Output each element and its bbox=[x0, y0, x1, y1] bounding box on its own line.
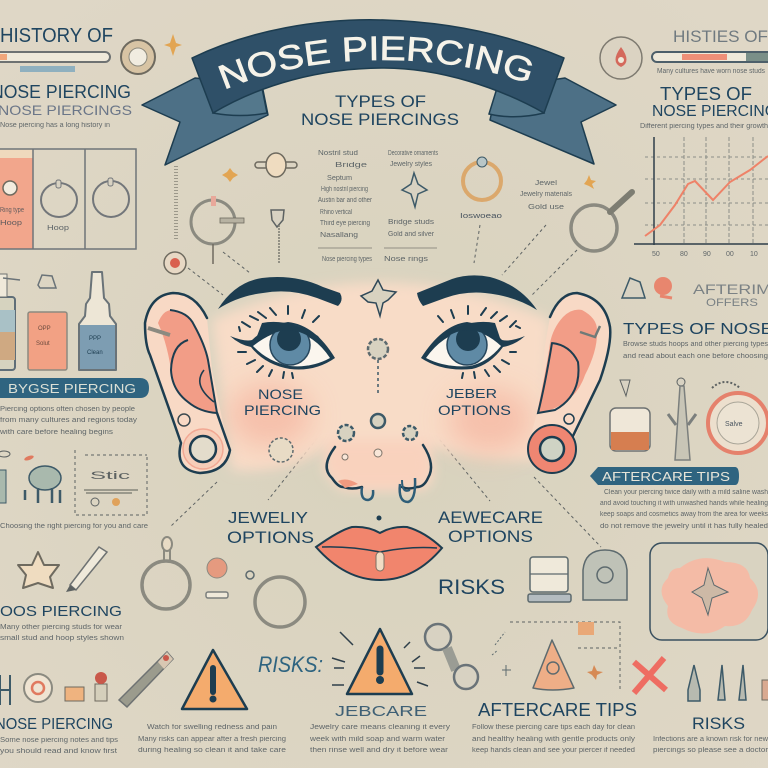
timeline bar bbox=[0, 52, 110, 72]
panel: three ring cards: Hoop bbox=[0, 220, 22, 227]
top-right block: Different piercing types and their growth bbox=[640, 123, 768, 130]
heading: nose piercing lower: you should read and know first bbox=[0, 748, 117, 755]
label: jewelry options: JEWELIY bbox=[228, 510, 308, 527]
heading: risks lower: Infections are a known risk for new bbox=[653, 736, 768, 743]
icons and label: aftercare offers: AFTERIM bbox=[693, 281, 768, 297]
heading: jebcare: Jewelry care means cleaning it every bbox=[310, 724, 451, 731]
right eyebrow bbox=[417, 275, 537, 310]
subtitle: types of nose piercings bbox=[301, 92, 459, 129]
heading: risks lower: RISKS bbox=[692, 714, 745, 733]
text block: aftercare tips bbox=[600, 489, 768, 530]
jewelry: magnifier ring bbox=[571, 192, 632, 251]
text column: piercing list two: Nose rings bbox=[384, 256, 429, 263]
top-left block: history bbox=[0, 25, 132, 129]
panel: dashed spec card bbox=[0, 450, 148, 530]
panel: three ring cards: Ring type bbox=[0, 207, 24, 214]
line chart: 00 bbox=[726, 251, 734, 258]
panel: three ring cards: Hoop bbox=[47, 225, 69, 232]
third eye stud bbox=[361, 280, 396, 395]
text column: piercing list: Septum bbox=[327, 175, 352, 182]
nose bbox=[327, 414, 431, 502]
icon: cream jar bbox=[610, 408, 650, 451]
icon: spike needle bbox=[668, 386, 696, 460]
heading: types of nose right: Browse studs hoops and other piercing types bbox=[623, 341, 768, 348]
warning triangle one bbox=[182, 650, 247, 709]
text column: piercing list: Austin bar and other bbox=[318, 197, 373, 204]
heading: aftercare tips lower: and healthy healing with gentle products only bbox=[472, 736, 636, 743]
panel: healing piercing diagram bbox=[650, 543, 768, 640]
face label: nose piercing: NOSE bbox=[258, 386, 303, 402]
icon: storage box bbox=[528, 557, 571, 602]
jewelry: ring with bar bbox=[191, 196, 244, 264]
heading: jebcare: JEBCARE bbox=[335, 703, 427, 720]
ring 1 bbox=[41, 183, 77, 217]
earring right bbox=[528, 425, 576, 473]
icon: salve tin: Salve bbox=[725, 421, 743, 428]
icon: salve tin bbox=[708, 393, 768, 453]
heading: aftercare tips lower: AFTERCARE TIPS bbox=[478, 700, 637, 720]
heading: oos piercing: Many other piercing studs for wear bbox=[0, 624, 123, 631]
text block under banner: with care before healing begins bbox=[0, 429, 114, 436]
face label: nose piercing: PIERCING bbox=[244, 402, 321, 418]
dashed box and cone icon bbox=[492, 622, 620, 690]
heading: jebcare: during healing so clean it and take care bbox=[138, 747, 286, 754]
box: Solut bbox=[36, 341, 50, 347]
face skin bbox=[212, 282, 550, 488]
text column: piercing list: Nostril stud bbox=[318, 150, 358, 157]
icons and label: aftercare offers bbox=[622, 277, 768, 309]
banner: aftercare tips: AFTERCARE TIPS bbox=[602, 469, 730, 484]
text block: aftercare tips: do not remove the jewelry until it has fully healed bbox=[600, 523, 768, 530]
heading: aftercare tips lower bbox=[472, 700, 637, 754]
top-right block: HISTIES OF bbox=[673, 27, 768, 46]
face label: jeber options: OPTIONS bbox=[438, 402, 511, 418]
icon: star stud bbox=[18, 552, 59, 588]
label: jewelry options bbox=[227, 510, 314, 547]
small bar column bbox=[174, 166, 178, 240]
subtitle: types of nose piercings: NOSE PIERCINGS bbox=[301, 110, 459, 129]
heading: jebcare bbox=[138, 703, 451, 754]
heading: jebcare: Watch for swelling redness and pain bbox=[147, 724, 277, 731]
text column: piercing list: Nasallang bbox=[320, 232, 358, 239]
jewelry: gold ring bbox=[460, 157, 502, 220]
icons: small row bbox=[620, 378, 740, 396]
top-left block: history: HISTORY OF bbox=[0, 25, 113, 47]
text column: piercing list: Third eye piercing bbox=[320, 220, 370, 227]
banner: aftercare tips bbox=[590, 467, 739, 485]
banner: nose piercing: BYGSE PIERCING bbox=[8, 381, 136, 396]
label: jewelry options: OPTIONS bbox=[227, 528, 314, 547]
lips bbox=[316, 516, 442, 580]
heading: aftercare tips lower: Follow these piercing care tips each day for clean bbox=[472, 724, 635, 731]
left ear bbox=[145, 293, 230, 473]
icons: bottom-left row bbox=[0, 672, 107, 705]
icons: tools row bbox=[0, 451, 61, 503]
heading: jebcare: Many risks can appear after a fresh piercing bbox=[138, 736, 286, 743]
heading: oos piercing bbox=[0, 603, 124, 642]
label: aewecare options bbox=[438, 508, 543, 546]
cheek stud bbox=[269, 438, 293, 462]
text block under banner: from many cultures and regions today bbox=[0, 417, 138, 424]
panel: dashed spec card: Choosing the right piercing for you and care bbox=[0, 523, 148, 530]
icon: sparkle bbox=[164, 34, 182, 56]
jewelry: stud pin bbox=[271, 210, 284, 264]
text column: piercing list two bbox=[384, 150, 438, 263]
icon: star bbox=[584, 175, 596, 189]
line chart: 10 bbox=[750, 251, 758, 258]
label: aewecare options: AEWECARE bbox=[438, 508, 543, 527]
text column: piercing list two: Bridge studs bbox=[388, 219, 435, 226]
heading: nose piercing lower: Some nose piercing notes and tips bbox=[0, 737, 119, 744]
heading: aftercare tips lower: keep hands clean and see your piercer if needed bbox=[472, 747, 635, 754]
text block: aftercare tips: Clean your piercing twice daily with a mild saline wash bbox=[604, 489, 768, 496]
top-left block: history: NOSE PIERCINGS bbox=[0, 102, 132, 118]
nostril studs bbox=[338, 414, 417, 460]
top-right block bbox=[640, 27, 768, 130]
icon: gem medallion bbox=[121, 40, 155, 74]
right eye bbox=[421, 306, 525, 378]
text block: small labels bbox=[520, 180, 572, 211]
heading: risks lower bbox=[653, 714, 768, 754]
jewelry: bead with bars bbox=[255, 153, 297, 177]
text block: small labels: Gold use bbox=[528, 204, 564, 211]
box: OPP bbox=[38, 326, 51, 332]
text column: piercing list: Rhino vertical bbox=[320, 209, 352, 216]
text column: piercing list: Nose piercing types bbox=[322, 256, 372, 263]
panel: three ring cards bbox=[0, 149, 136, 249]
jewelry: plain ring bbox=[255, 577, 305, 627]
heading: oos piercing: OOS PIERCING bbox=[0, 603, 122, 620]
text column: piercing list: High nostril piercing bbox=[321, 186, 368, 193]
aftercare bottles bbox=[0, 272, 116, 370]
jewelry: flower stud bbox=[164, 252, 186, 274]
earring left bbox=[183, 429, 223, 469]
face label: jeber options bbox=[438, 386, 511, 418]
heading: types of nose right: TYPES OF NOSE bbox=[623, 321, 768, 338]
bottle 2 bbox=[79, 272, 116, 370]
icon: needle pen bbox=[66, 547, 107, 592]
warning triangle two with rays bbox=[332, 629, 428, 694]
left eye bbox=[230, 306, 335, 378]
left eyebrow bbox=[218, 277, 342, 309]
line chart bbox=[634, 137, 768, 258]
face label: nose piercing bbox=[244, 386, 321, 418]
text column: piercing list: Bridge bbox=[335, 162, 367, 169]
connector lines bbox=[170, 225, 601, 547]
panel: dashed spec card: Stic bbox=[90, 470, 131, 482]
box bbox=[28, 312, 67, 370]
line chart: 50 bbox=[652, 251, 660, 258]
title text: NOSE PIERCING bbox=[218, 36, 532, 89]
text block: small labels: Jewelry materials bbox=[520, 191, 572, 198]
top-left block: history: Nose piercing has a long history in bbox=[0, 122, 110, 129]
top-right block: Many cultures have worn nose studs bbox=[657, 68, 765, 75]
text column: piercing list two: Gold and silver bbox=[388, 231, 435, 238]
text block: small labels: Jewel bbox=[535, 180, 558, 187]
heading: types of nose right bbox=[623, 321, 768, 360]
text column: piercing list two: Jewelry styles bbox=[390, 161, 432, 168]
text block under banner: Piercing options often chosen by people bbox=[0, 406, 135, 413]
label: risks: RISKS bbox=[438, 576, 505, 599]
heading: types of nose right: and read about each one before choosing bbox=[623, 353, 768, 360]
title ribbon bbox=[141, 19, 617, 166]
top-right block: TYPES OF bbox=[660, 84, 752, 104]
handwritten risks label: RISKS: bbox=[258, 652, 323, 677]
icon: saline dispenser bbox=[583, 550, 627, 600]
heading: nose piercing lower bbox=[0, 716, 119, 755]
face label: jeber options: JEBER bbox=[446, 386, 497, 401]
bottle 2: PPP bbox=[89, 336, 101, 342]
line chart: 80 bbox=[680, 251, 688, 258]
icons and label: aftercare offers: OFFERS bbox=[706, 297, 758, 309]
jewelry: ring with stem bbox=[142, 537, 190, 609]
timeline bar bbox=[652, 52, 768, 62]
icon: piercing pen bbox=[119, 652, 173, 707]
subtitle: types of nose piercings: TYPES OF bbox=[335, 92, 426, 111]
jewelry: cross stud bbox=[402, 173, 427, 207]
line chart: 90 bbox=[703, 251, 711, 258]
text column: piercing list two: Decorative ornaments bbox=[388, 150, 438, 157]
label: aewecare options: OPTIONS bbox=[448, 527, 533, 546]
heading: jebcare: week with mild soap and warm water bbox=[309, 736, 446, 743]
labret stud bbox=[376, 552, 384, 571]
text block under banner bbox=[0, 406, 138, 436]
text column: piercing list bbox=[318, 150, 373, 263]
bottle 2: Clean bbox=[87, 350, 103, 356]
icon: sparkle bbox=[222, 168, 238, 182]
ring 2 bbox=[93, 181, 129, 217]
icon: drop medallion bbox=[600, 37, 642, 79]
heading: oos piercing: small stud and hoop styles shown bbox=[0, 635, 124, 642]
heading: risks lower: piercings so please see a doctor bbox=[653, 747, 768, 754]
jewelry: gold ring: Ioswoeao bbox=[460, 213, 502, 220]
jewelry: bead and bar bbox=[206, 558, 254, 598]
septum rings bbox=[362, 487, 373, 500]
clamp tool bbox=[425, 624, 478, 689]
heading: jebcare: then rinse well and dry it before wear bbox=[310, 747, 449, 754]
banner: nose piercing bbox=[0, 378, 149, 398]
icon: red cross bbox=[634, 658, 666, 693]
icons: needle set bbox=[688, 665, 768, 701]
bottle 1 bbox=[0, 274, 15, 370]
right ear bbox=[527, 293, 610, 473]
